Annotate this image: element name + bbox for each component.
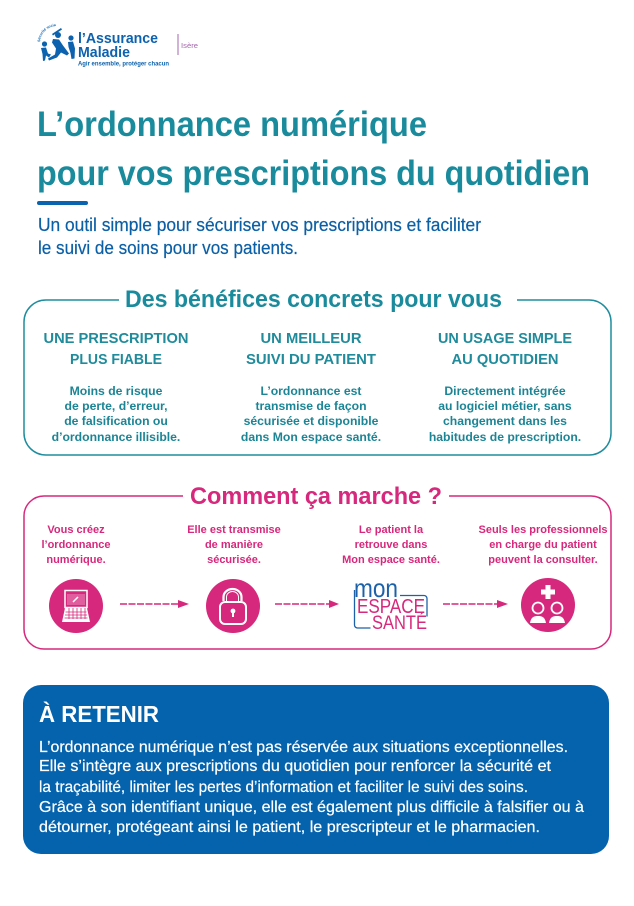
panel: how it works	[24, 483, 611, 649]
takeaway text: la traçabilité, limiter les pertes d’information et faciliter le suivi des soins.	[39, 779, 528, 796]
title accent bar	[37, 201, 88, 205]
benefit: simple everyday use: changement dans les	[443, 414, 567, 428]
region name: Isère	[181, 41, 198, 50]
step 3 text: Le patient la	[359, 524, 424, 536]
benefit: better follow-up: SUIVI DU PATIENT	[246, 351, 376, 368]
icon: laptop	[49, 579, 103, 633]
benefit: simple everyday use: UN USAGE SIMPLE	[438, 330, 572, 347]
step 4 text: en charge du patient	[489, 539, 597, 551]
step 2 text: sécurisée.	[207, 554, 261, 566]
logo: Mon espace santé: SANTÉ	[372, 613, 427, 634]
takeaway text: Elle s’intègre aux prescriptions du quotidien pour renforcer la sécurité et	[39, 758, 552, 775]
benefit: reliable prescription: PLUS FIABLE	[70, 351, 162, 368]
icon: health professionals	[521, 578, 575, 632]
region name	[178, 34, 198, 55]
step 3 text	[342, 524, 440, 566]
logo tagline: Agir ensemble, protéger chacun	[78, 60, 169, 68]
title: L’ordonnance numérique	[37, 105, 427, 144]
logo: l'Assurance Maladie: Maladie	[78, 44, 130, 61]
takeaway text	[39, 739, 584, 836]
takeaway text: Grâce à son identifiant unique, elle est également plus difficile à falsifier ou à	[39, 799, 584, 816]
step 1 text	[41, 524, 111, 566]
benefit: better follow-up: L’ordonnance est	[261, 384, 361, 398]
title: pour vos prescriptions du quotidien	[37, 154, 590, 193]
arrow 1	[120, 600, 189, 608]
arrow 2	[275, 600, 339, 608]
step 2 text: de manière	[205, 539, 263, 551]
benefit: simple everyday use	[429, 330, 581, 444]
step 1 text: numérique.	[46, 554, 106, 566]
logo: Mon espace santé: mon	[354, 573, 398, 603]
logo: l'Assurance Maladie	[38, 24, 198, 68]
benefit: reliable prescription: UNE PRESCRIPTION	[44, 330, 188, 347]
icon: padlock	[206, 579, 260, 633]
logo: Mon espace santé: ESPACE	[357, 596, 425, 618]
benefit: simple everyday use: au logiciel métier, sans	[438, 399, 572, 413]
benefits heading: Des bénéfices concrets pour vous	[125, 286, 502, 313]
panel: key takeaway	[23, 685, 609, 854]
title	[37, 105, 590, 193]
subtitle	[38, 215, 481, 258]
benefit: reliable prescription	[44, 330, 188, 444]
logo: Mon espace santé	[354, 573, 427, 634]
step 4 text: Seuls les professionnels	[478, 524, 608, 536]
step 4 text	[478, 524, 608, 566]
step 1 text: l’ordonnance	[41, 539, 111, 551]
step 3 text: Mon espace santé.	[342, 554, 440, 566]
logo wordmark: l’Assurance	[78, 30, 158, 47]
benefit: better follow-up	[241, 330, 381, 444]
subtitle: le suivi de soins pour vos patients.	[38, 238, 298, 258]
benefit: reliable prescription: de perte, d’erreur,	[65, 399, 167, 413]
step 3 text: retrouve dans	[355, 539, 427, 551]
benefit: better follow-up: sécurisée et disponible	[244, 414, 379, 428]
benefit: simple everyday use: habitudes de prescription.	[429, 430, 581, 444]
step 2 text	[187, 524, 281, 566]
benefit: better follow-up: dans Mon espace santé.	[241, 430, 381, 444]
takeaway text: L’ordonnance numérique n’est pas réservée aux situations exceptionnelles.	[39, 739, 568, 756]
benefit: reliable prescription: Moins de risque	[70, 384, 163, 398]
benefit: simple everyday use: AU QUOTIDIEN	[452, 351, 558, 368]
benefit: reliable prescription: d’ordonnance illisible.	[52, 430, 180, 444]
arrow 3	[443, 600, 508, 608]
takeaway text: détourner, protégeant ainsi le patient, le prescripteur et le pharmacien.	[39, 819, 540, 836]
step 4 text: peuvent la consulter.	[488, 554, 598, 566]
icon: running figures	[38, 24, 75, 61]
step 2 text: Elle est transmise	[187, 524, 281, 536]
benefit: reliable prescription: de falsification ou	[64, 414, 168, 428]
step 1 text: Vous créez	[47, 524, 105, 536]
how it works heading: Comment ça marche ?	[190, 483, 442, 510]
benefit: better follow-up: UN MEILLEUR	[260, 330, 362, 347]
panel: benefits	[24, 286, 611, 455]
benefit: simple everyday use: Directement intégrée	[444, 384, 566, 398]
takeaway heading: À RETENIR	[39, 700, 159, 727]
subtitle: Un outil simple pour sécuriser vos prescriptions et faciliter	[38, 215, 481, 235]
benefit: better follow-up: transmise de façon	[255, 399, 367, 413]
